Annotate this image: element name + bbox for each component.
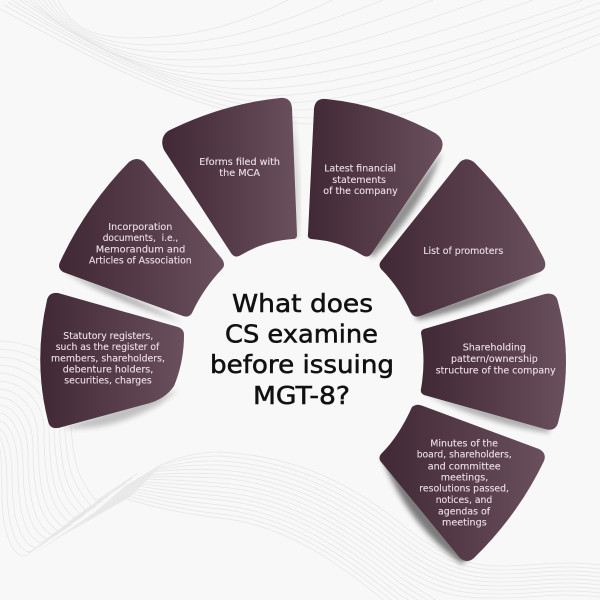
text: statutory registers: securities, charges xyxy=(64,376,152,387)
panel: latest financial statements xyxy=(308,99,443,258)
text: incorporation documents: Articles of Association xyxy=(89,256,192,267)
title: What does xyxy=(232,289,373,318)
text: incorporation documents xyxy=(89,222,192,267)
text: list of promoters: List of promoters xyxy=(423,246,503,257)
text: minutes of meetings: meetings, xyxy=(441,473,488,484)
text: eforms: the MCA xyxy=(219,168,260,179)
tile: shareholding pattern xyxy=(421,294,566,430)
text: statutory registers: debenture holders, xyxy=(63,365,153,376)
text: minutes of meetings: Minutes of the xyxy=(430,438,498,449)
tile: latest financial statements xyxy=(308,99,443,257)
text: eforms: Eforms filed with xyxy=(199,157,280,168)
text: latest financial statements: statements xyxy=(332,175,386,186)
text: latest financial statements: Latest financial xyxy=(324,163,396,174)
text: eforms xyxy=(199,157,280,179)
panel: incorporation documents xyxy=(59,159,224,322)
panel: shareholding pattern xyxy=(421,294,566,433)
text: minutes of meetings: meetings xyxy=(442,518,487,529)
text: incorporation documents: Memorandum and xyxy=(96,244,185,255)
panel: eforms xyxy=(162,98,299,257)
text: statutory registers xyxy=(51,331,165,387)
text: shareholding pattern: Shareholding xyxy=(463,343,526,354)
tile: incorporation documents xyxy=(59,159,224,317)
text: statutory registers: such as the register of xyxy=(56,342,160,353)
panel: minutes of meetings xyxy=(380,405,545,564)
text: statutory registers: members, shareholders, xyxy=(51,353,165,364)
text: minutes of meetings: agendas of xyxy=(438,506,491,517)
text: statutory registers: Statutory registers, xyxy=(63,331,153,342)
tile: statutory registers xyxy=(40,293,184,428)
panel: list of promoters xyxy=(380,159,545,320)
text: shareholding pattern xyxy=(436,343,556,376)
tile: minutes of meetings xyxy=(380,405,545,561)
text: shareholding pattern: structure of the company xyxy=(436,365,556,376)
text: shareholding pattern: pattern/ownership xyxy=(451,354,538,365)
tile: eforms xyxy=(162,98,297,257)
title: before issuing xyxy=(210,350,394,379)
panel: statutory registers xyxy=(40,293,184,428)
background waves: top xyxy=(0,0,600,125)
text: latest financial statements: of the company xyxy=(323,186,398,197)
background waves: bottom ribbon xyxy=(0,341,600,600)
title xyxy=(210,289,394,410)
text: minutes of meetings: board, shareholders, xyxy=(417,450,512,461)
tile: list of promoters xyxy=(380,159,545,317)
text: incorporation documents: Incorporation xyxy=(108,222,172,233)
text: minutes of meetings: resolutions passed, xyxy=(419,484,509,495)
text: minutes of meetings: notices, and xyxy=(436,495,492,506)
text: latest financial statements xyxy=(323,163,398,197)
title: CS examine xyxy=(225,320,378,349)
title: MGT-8? xyxy=(253,381,350,410)
text: incorporation documents: documents, i.e., xyxy=(103,233,178,244)
text: minutes of meetings: and committee xyxy=(428,461,501,472)
text: minutes of meetings xyxy=(417,438,512,529)
